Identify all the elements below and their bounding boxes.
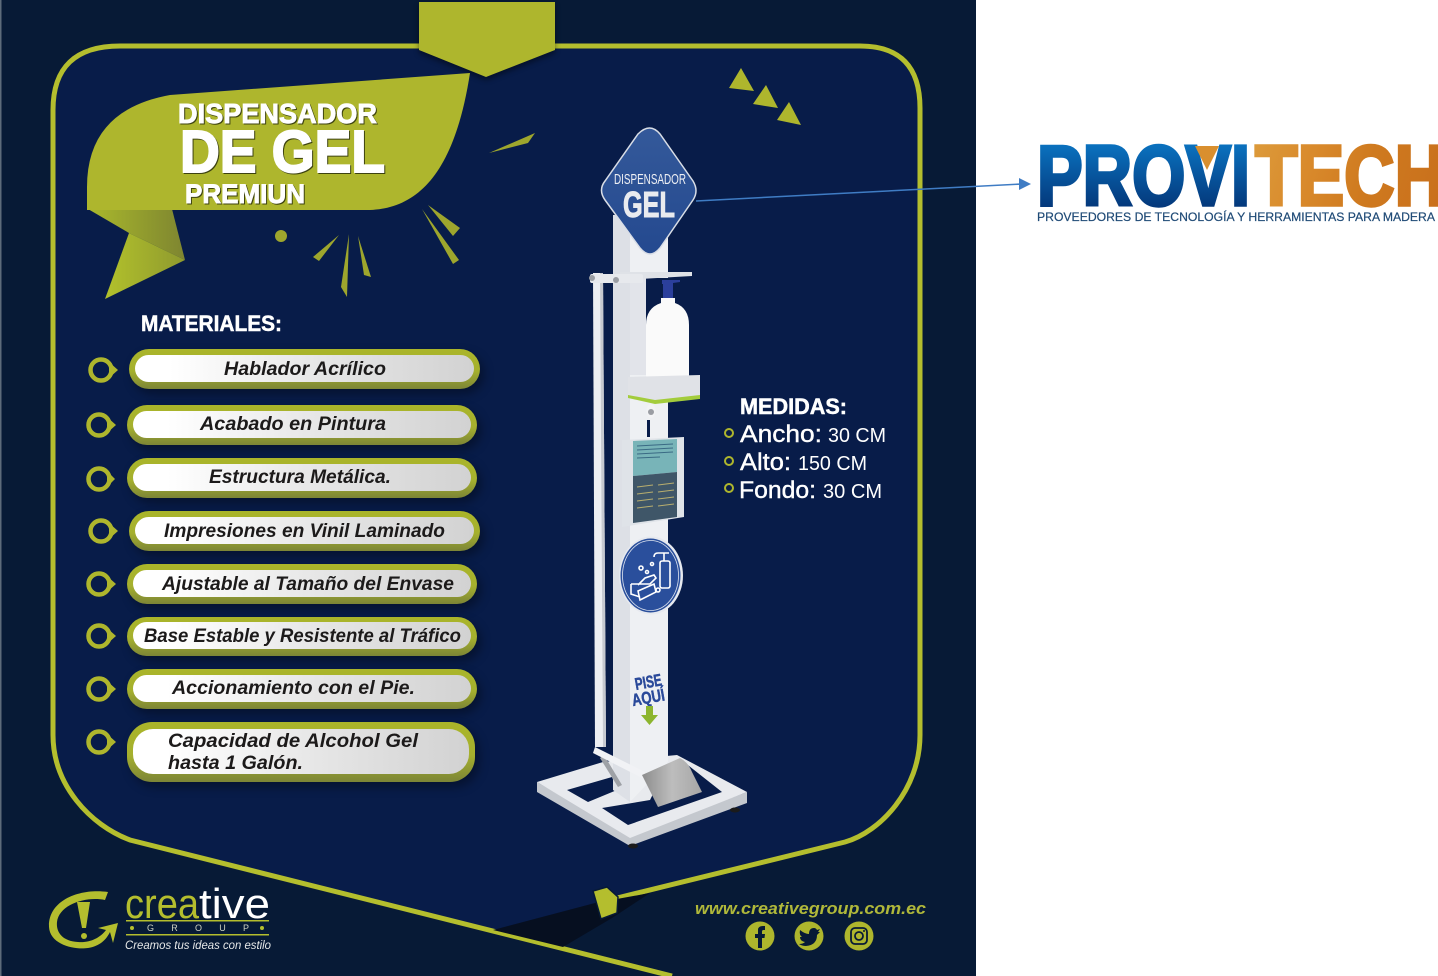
marker shadow xyxy=(493,893,650,947)
connector arrow xyxy=(696,178,1031,201)
poster background xyxy=(0,0,976,976)
title: dispensador: DISPENSADOR xyxy=(178,98,377,129)
item 8: Capacidad de Alcohol Gel xyxy=(168,730,419,752)
ancho: 30 CM xyxy=(828,425,886,447)
alto: Alto: xyxy=(740,449,791,476)
website url: www.creativegroup.com.ec xyxy=(695,899,927,918)
item 1: Hablador Acrílico xyxy=(224,358,386,380)
pise aqui label: AQUÍ xyxy=(630,685,667,710)
item 5: Ajustable al Tamaño del Envase xyxy=(161,573,454,595)
item 7 xyxy=(88,669,477,709)
provitech logo xyxy=(1037,129,1438,224)
pedal xyxy=(642,758,702,807)
base frame xyxy=(537,755,747,848)
triangles decoration xyxy=(729,68,801,125)
left edge strip xyxy=(0,0,2,976)
logo group row xyxy=(126,920,269,936)
inner panel and frame xyxy=(53,46,920,976)
green arrow down xyxy=(641,706,658,725)
title: de gel: DE GEL xyxy=(180,119,385,185)
pedal arm xyxy=(593,747,645,787)
v notch xyxy=(1195,146,1219,170)
pentagon marker xyxy=(593,887,618,919)
ancho xyxy=(725,421,886,448)
provitech tagline: PROVEEDORES DE TECNOLOGÍA Y HERRAMIENTAS PARA MADERA xyxy=(1037,209,1435,224)
info card holder xyxy=(622,437,684,527)
icon: twitter xyxy=(794,922,824,950)
logo tagline: Creamos tus ideas con estilo xyxy=(125,940,272,952)
item 4 xyxy=(90,511,480,551)
push rod xyxy=(593,273,606,747)
item 8: hasta 1 Galón. xyxy=(168,752,303,774)
logo group row: GROUP xyxy=(147,923,249,933)
banner body xyxy=(87,73,470,210)
medidas heading: MEDIDAS: xyxy=(740,394,847,419)
item 2: Acabado en Pintura xyxy=(199,413,386,435)
alto xyxy=(725,449,867,476)
item 6 xyxy=(88,617,477,656)
diamond sign: DISPENSADOR xyxy=(614,172,686,188)
materials list xyxy=(88,349,480,782)
dispenser product xyxy=(537,128,747,848)
top pentagon tab xyxy=(419,2,555,77)
provi wordmark: PROVI xyxy=(1037,129,1250,224)
item 3 xyxy=(88,458,477,498)
white right area xyxy=(976,0,1438,976)
title banner xyxy=(87,73,470,299)
top shelf xyxy=(589,272,692,283)
burst decoration xyxy=(275,133,535,297)
logo swoosh and exclamation xyxy=(49,891,118,948)
banner tail xyxy=(88,209,185,299)
logo wordmark: crea xyxy=(125,880,200,927)
title: premiun: PREMIUN xyxy=(185,179,305,209)
item 6: Base Estable y Resistente al Tráfico xyxy=(144,625,461,647)
fondo xyxy=(725,477,882,504)
bottle holder xyxy=(628,375,700,404)
item 3: Estructura Metálica. xyxy=(209,466,391,488)
diamond sign xyxy=(602,128,696,254)
item 1 xyxy=(90,349,480,389)
ancho: Ancho: xyxy=(740,421,822,448)
icon: instagram xyxy=(844,922,874,950)
creative group logo xyxy=(49,880,272,952)
pise aqui label xyxy=(630,671,667,710)
hand wash sign xyxy=(619,536,683,614)
item 5 xyxy=(88,564,477,604)
bracket bolt xyxy=(646,404,656,418)
alto: 150 CM xyxy=(798,453,867,475)
pise aqui label: PISE xyxy=(633,671,663,694)
item 7: Accionamiento con el Pie. xyxy=(171,677,415,699)
pole xyxy=(613,215,668,802)
diamond sign: GEL xyxy=(623,184,675,225)
social icons xyxy=(746,922,874,950)
item 8 xyxy=(88,722,475,782)
bottle xyxy=(646,280,689,378)
measures block xyxy=(725,394,886,504)
item 2 xyxy=(88,405,477,445)
materiales heading: MATERIALES: xyxy=(141,311,282,336)
logo wordmark accent: tive xyxy=(199,880,270,927)
icon: facebook xyxy=(746,922,774,950)
fondo: Fondo: xyxy=(739,477,816,504)
fondo: 30 CM xyxy=(823,481,882,503)
item 4: Impresiones en Vinil Laminado xyxy=(164,520,445,542)
